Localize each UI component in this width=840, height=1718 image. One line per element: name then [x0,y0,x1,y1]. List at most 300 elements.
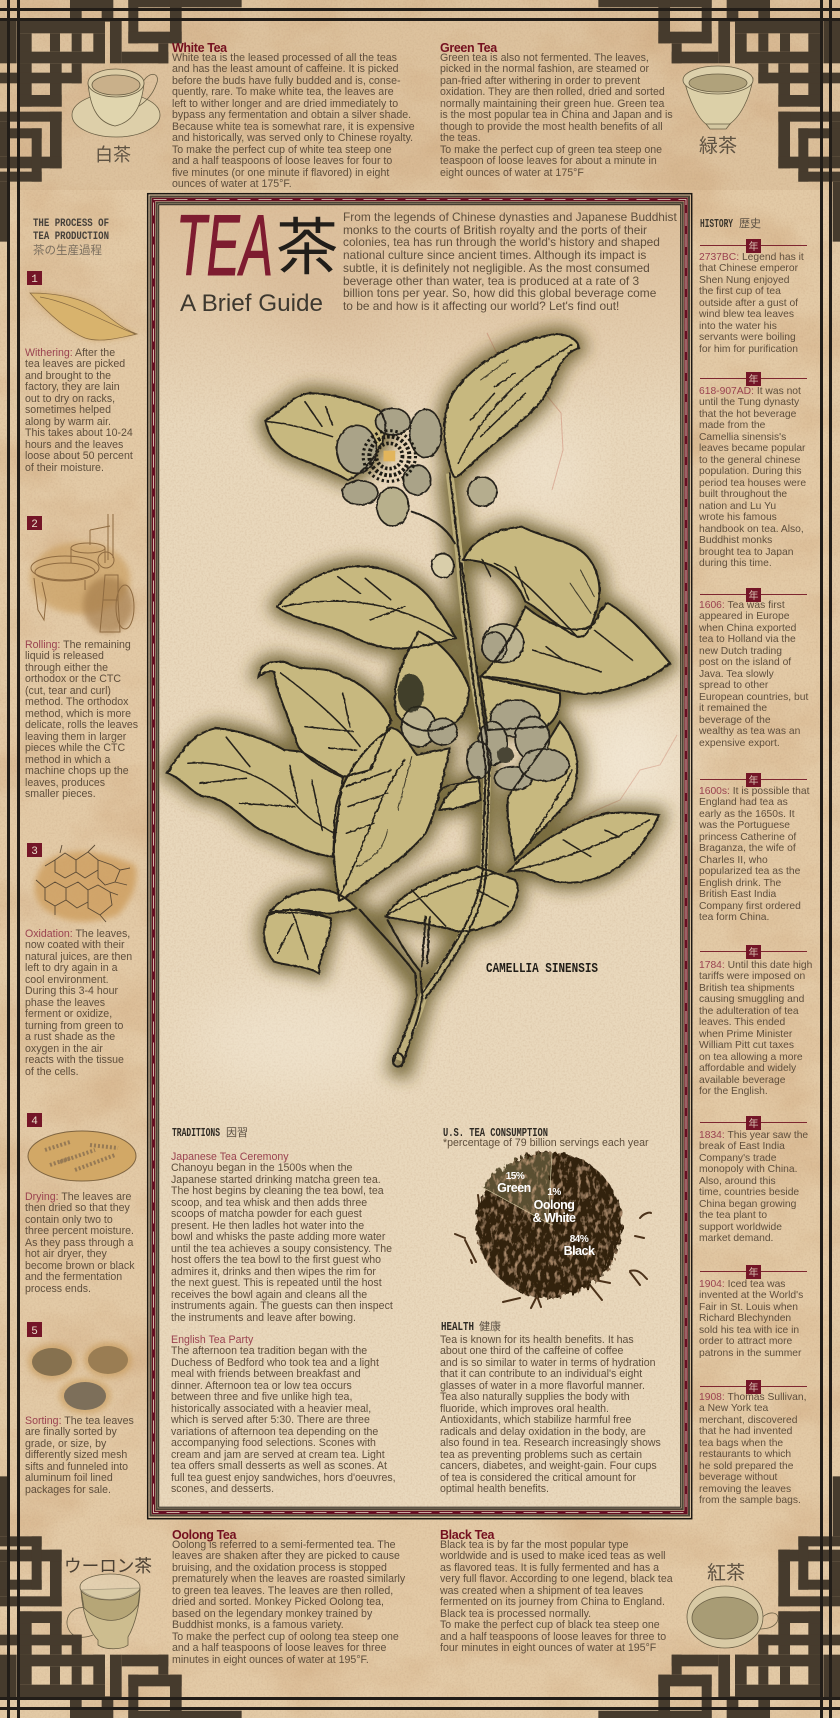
history text 2737BC: 2737BC: Legend has it [699,252,804,263]
text: white tea: To make the perfect cup of white tea steep one [172,144,392,156]
health heading: 健康 [479,1318,501,1334]
title [176,197,338,317]
step 1 badge [27,271,42,286]
white tea label: 白茶 [95,141,131,167]
corner fret bottom right [598,1476,840,1718]
text: white tea: left to wither longer and are dried immediately to [172,98,398,110]
step 4 drying tray illustration [28,1131,136,1181]
health text: Antioxidants, which stabilize harmful free [440,1414,631,1426]
health text: glasses of water in a more flavorful manner. [440,1380,645,1392]
history text 1600s: Company first ordered [699,901,801,912]
history text 618-907AD: until the Tung dynasty [699,397,799,408]
history text 1606: it remained the [699,703,767,714]
step 1 text: tea leaves are picked [25,358,125,370]
black tea cup [687,1586,778,1648]
text: black tea: worldwide and is used to make iced teas as well [440,1550,666,1562]
history text 1834: the tea plant to [699,1210,767,1221]
pie labels: Green [497,1181,531,1195]
history text 2737BC: into the water his [699,321,777,332]
history text 1834: China began growing [699,1199,796,1210]
health text: also found in tea. Research increasingly shows [440,1437,661,1449]
step 3 text: reacts with the tissue [25,1054,124,1066]
step 3 text: cool environment. [25,974,109,986]
traditions heading: 因習 [226,1124,248,1140]
traditions: japanese tea ceremony text: Chanoyu began in the 1500s when the [171,1162,352,1174]
health text: that it can contribute to an individual's eight [440,1368,642,1380]
text: black tea: and a half teaspoons of loose leaves for three to [440,1631,666,1643]
step 3 text: now coated with their [25,939,125,951]
step 4 text: then dried so that they [25,1202,130,1214]
step 2 text: method. The orthodox [25,696,128,708]
history text 1600s: early as the 1650s. It [699,809,795,820]
step 1 leaf illustration [30,293,137,340]
step 3 text: of the cells. [25,1066,79,1078]
history text 1606: European countries, but [699,692,808,703]
step 2 rolling machine illustration [30,514,134,633]
black tea label: 紅茶 [707,1558,745,1585]
history text 1600s: British East India [699,889,776,900]
text: oolong tea: minutes in eight ounces of water at 195°F. [172,1654,369,1666]
history text 1904: 1904: Iced tea was [699,1279,785,1290]
text: white tea: and historically, was served only to Chinese royalty. [172,132,413,144]
white tea cup [72,69,160,137]
history text 1834: 1834: This year saw the [699,1130,808,1141]
history text 1606: 1606: Tea was first [699,600,785,611]
corner fret top left [0,0,242,242]
history marker 1908: 年 [748,1379,758,1394]
traditions: japanese tea ceremony text: present. He then ladles hot water into the [171,1220,364,1232]
history text 1606: appeared in Europe [699,611,789,622]
step 1 text: This takes about 10-24 [25,427,133,439]
history text 1834: break of East India [699,1141,785,1152]
intro text: national culture since ancient times. Although its impact is [343,248,646,262]
history text 1834: monopoly with China. [699,1164,797,1175]
history text 1834 [699,1130,808,1244]
history text 1908: he sold prepared the [699,1461,793,1472]
step 1 text: Withering: After the [25,347,115,359]
health text: and is so similar to water in terms of hydration [440,1357,656,1369]
history text 1908: that he had invented [699,1426,792,1437]
health text [440,1334,661,1495]
text: green tea: pan-fried after withering in order to prevent [440,75,640,87]
traditions: english tea party text: variations of afternoon tea depending on the [171,1426,378,1438]
history text 1908: 1908: Thomas Sullivan, [699,1392,806,1403]
step 5 text: aluminum foil lined [25,1472,113,1484]
text: oolong tea: prematurely when the leaves are roasted similarly [172,1573,405,1585]
plant outlines and veins [167,334,670,1067]
process heading: THE PROCESS OF [33,218,109,230]
title kanji: 茶 [276,197,338,287]
history text 1606: wealthy as tea was an [699,726,800,737]
step 5 text: sifts and funneled into [25,1461,128,1473]
step 5 text: are finally sorted by [25,1426,117,1438]
history text 618-907AD: built throughout the [699,489,787,500]
intro text: monks to the courts of British royalty and the ports of their [343,223,647,237]
text: green tea: the teas. [440,132,481,144]
step 2 text: leaves, produces [25,777,105,789]
plant leaf fills [167,334,670,973]
history text 1784 [699,960,812,1097]
health text: radicals and delay oxidation in the body, are [440,1426,646,1438]
traditions: japanese tea ceremony text: admires it, drinks and then wipes the rim for [171,1266,376,1278]
process heading [33,218,109,258]
history text 1606: Java. Tea slowly [699,669,774,680]
step 5 text [25,1415,134,1496]
green tea label: 緑茶 [699,131,737,158]
process heading: 茶の生産過程 [33,242,102,258]
traditions: japanese tea ceremony text: scoops of matcha powder for each guest [171,1208,362,1220]
history text 1834: market demand. [699,1233,773,1244]
text: green tea: is the most popular tea in China and Japan and is [440,109,673,121]
consumption subtitle: *percentage of 79 billion servings each year [443,1137,649,1149]
history text 1600s: Braganza, the wife of [699,843,796,854]
health text: about one third of the caffeine of coffee [440,1345,623,1357]
text: green tea: normally maintaining their green hue. Green tea [440,98,664,110]
consumption heading: U.S. TEA CONSUMPTION [443,1127,548,1140]
history text 618-907AD: made from the [699,420,765,431]
pie labels: 84% [570,1234,589,1245]
heading: oolong tea: Oolong Tea [172,1528,236,1542]
step 1 text: of their moisture. [25,462,104,474]
step 4 text: As they pass through a [25,1237,133,1249]
step 3 text: ferment or oxidize, [25,1008,112,1020]
history marker 1600s: 年 [748,772,758,787]
step 3 text: Oxidation: The leaves, [25,928,130,940]
oolong tea label: ウーロン茶 [64,1553,152,1578]
text: green tea: though to provide the most health benefits of all [440,121,663,133]
step 5 text: packages for sale. [25,1484,111,1496]
text: black tea: To make the perfect cup of black tea steep one [440,1619,660,1631]
traditions: japanese tea ceremony text: Japanese Tea Ceremony [171,1151,289,1163]
subtitle: A Brief Guide [180,290,323,317]
step 4 badge [27,1113,42,1128]
history text 1904: patrons in the summer [699,1348,801,1359]
step 2 badge [27,516,42,531]
history text 618-907AD: wrote his famous [699,512,777,523]
step 4 text: three percent moisture. [25,1225,134,1237]
history marker 1904: 年 [748,1264,758,1279]
central panel [148,194,692,1519]
step 5 text: Sorting: The tea leaves [25,1415,134,1427]
history text 2737BC [699,252,804,355]
history heading: 歴史 [739,215,761,231]
step 5 badge: 5 [31,1326,38,1338]
text: oolong tea: leaves are shaken after they are picked to cause [172,1550,400,1562]
panel border [148,194,692,1519]
step 3 text [25,928,132,1078]
intro text: subtle, it is definitely not negligible. As the most consumed [343,261,650,275]
history marker 2737BC: 年 [748,238,758,253]
text: white tea: before the buds have fully budded and is, conse- [172,75,401,87]
text: oolong tea: dried and sorted. Monkey Picked Oolong tea, [172,1596,384,1608]
pie labels: & White [532,1211,576,1225]
text: oolong tea: Oolong is referred to a semi-fermented tea. The [172,1539,396,1551]
heading: green tea: Green Tea [440,41,497,55]
history text 618-907AD: during this time. [699,558,772,569]
step 3 badge: 3 [31,846,38,858]
green tea wedge [482,1153,552,1223]
traditions: english tea party text [171,1334,396,1495]
step 2 text: pieces while the CTC [25,742,125,754]
health text: Tea also naturally supplies the body with [440,1391,630,1403]
step 1 text: hours and the leaves [25,439,123,451]
traditions: japanese tea ceremony text [171,1151,393,1324]
intro text: beverage other than water, tea is produced at a rate of 3 [343,274,639,288]
history text 1908: from the sample bags. [699,1495,801,1506]
text: white tea: five minutes (or one minute if flavored) in eight [172,167,389,179]
process heading: TEA PRODUCTION [33,231,109,243]
history text 1908: restaurants to which [699,1449,791,1460]
step 2 text: orthodox or the CTC [25,673,121,685]
step 3 text: oxygen in the air [25,1043,103,1055]
traditions: english tea party text: between three and five unlike high tea, [171,1391,352,1403]
step 2 text: Rolling: The remaining [25,639,131,651]
history text 1834: support worldwide [699,1222,782,1233]
intro text [343,210,677,313]
history text 1908: beverage without [699,1472,777,1483]
health heading [441,1318,501,1334]
history text 1606: new Dutch trading [699,646,782,657]
flower centres [384,451,514,763]
text: oolong tea [172,1539,406,1666]
step 2 text: leaving them in larger [25,731,126,743]
step 4 text: Drying: The leaves are [25,1191,131,1203]
history text 618-907AD: to the general chinese [699,455,800,466]
step 3 text: turning from green to [25,1020,123,1032]
health text: optimal health benefits. [440,1483,549,1495]
text: oolong tea: Buddhist monks, is a famous variety. [172,1619,344,1631]
history text 1784: when Prime Minister [699,1029,792,1040]
history text 618-907AD: Camellia sinensis's [699,432,786,443]
step 1 badge: 1 [31,274,38,286]
text: green tea: To make the perfect cup of green tea steep one [440,144,662,156]
text: black tea: four minutes in eight ounces of water at 195°F [440,1642,656,1654]
heading: black tea: Black Tea [440,1528,494,1542]
health text: cancers, diabetes, and weight-gain. Four cups [440,1460,657,1472]
traditions: japanese tea ceremony text: scoop, and tea whisk and then adds three [171,1197,367,1209]
step 1 text: out to dry on racks, [25,393,115,405]
text: oolong tea: bruising, and the oxidation process is stopped [172,1562,387,1574]
history text 1834: time, countries beside [699,1187,799,1198]
tea consumption pie made of loose tea [455,1152,651,1308]
text: black tea: as flavored teas. It is fully fermented and has a [440,1562,659,1574]
traditions: japanese tea ceremony text: until the tea achieves a soupy consistency. The [171,1243,392,1255]
history text 2737BC: Shen Nung enjoyed [699,275,789,286]
history text 1784: causing smuggling and [699,994,804,1005]
history text 2737BC: that Chinese emperor [699,263,798,274]
plant stamens [363,431,424,713]
history text 1606: tea to Holland via the [699,634,796,645]
history text 1784: available beverage [699,1075,785,1086]
text: black tea: Black tea is by far the most popular type [440,1539,628,1551]
step 4 text: and the fermentation [25,1271,122,1283]
history text 2737BC: servants were boiling [699,332,796,343]
history text 1606: expensive export. [699,738,780,749]
step 2 text: method in which a [25,754,110,766]
intro text: colonies, tea has run through the world's history and shaped [343,235,660,249]
traditions: english tea party text: accompanying food selections. Scones with [171,1437,376,1449]
text: green tea: eight ounces of water at 175°F [440,167,584,179]
step 3 text: During this 3-4 hour [25,985,118,997]
traditions: english tea party text: meal with friends between breakfast and [171,1368,361,1380]
history text 1600s [699,786,810,923]
history text 1606: when China exported [699,623,796,634]
history marker 1834: 年 [748,1115,758,1130]
text: oolong tea: based on the legendary monkey trained by [172,1608,372,1620]
pie divider lines [482,1153,553,1225]
traditions: english tea party text: The afternoon tea tradition began with the [171,1345,367,1357]
history text 1600s: 1600s: It is possible that [699,786,809,797]
traditions: english tea party text: full tea guest enjoy sandwiches, hors d'oeuvres, [171,1472,396,1484]
step 3 text: natural juices, are then [25,951,132,963]
history text 618-907AD: nation and Lu Yu [699,501,776,512]
text: green tea [440,52,673,179]
history text 1834: Company's trade [699,1153,777,1164]
history text 1784: British tea shipments [699,983,795,994]
text: green tea: teaspoon of loose leaves for about a minute in [440,155,657,167]
health text: Tea is known for its health benefits. It has [440,1334,634,1346]
title word TEA: TEA [176,198,273,294]
text: black tea: was created when a shipment of tea leaves [440,1585,643,1597]
traditions: english tea party text: which is served after 5:30. There are three [171,1414,370,1426]
history text 1784: affordable and widely [699,1063,796,1074]
history text 1784: on tea allowing a more [699,1052,803,1063]
text: black tea [440,1539,673,1654]
health text: tea as preventing problems such as certain [440,1449,642,1461]
history text 1908: tea bags when the [699,1438,783,1449]
traditions: japanese tea ceremony text: the instruments and leave after bowing. [171,1312,356,1324]
step 2 text: delicate, rolls the leaves [25,719,138,731]
step 2 badge: 2 [31,519,38,531]
step 5 badge [27,1322,42,1338]
stray tea leaves [455,1195,651,1308]
intro text: From the legends of Chinese dynasties and Japanese Buddhist [343,210,677,224]
oolong tea cup [67,1574,140,1649]
text: white tea [172,52,415,190]
history text 2737BC: for him for purification [699,344,798,355]
history text 1606: spread to other [699,680,768,691]
plant stem fill [398,473,488,1060]
plant petals [337,408,569,790]
history marker 618-907AD: 年 [748,371,758,386]
text: green tea: picked in the normal fashion, are steamed or [440,63,649,75]
step 2 text: liquid is released [25,650,104,662]
traditions: english tea party text: dinner. Afternoon tea or low tea occurs [171,1380,352,1392]
history text 618-907AD: Buddhist monks [699,535,772,546]
text: white tea: and a half teaspoons of loose leaves for four to [172,155,392,167]
health heading: HEALTH [441,1321,474,1334]
history text 1784: William Pitt cut taxes [699,1040,794,1051]
traditions: japanese tea ceremony text: receives the bowl again and cleans all the [171,1289,367,1301]
history text 1904: sold his tea with ice in [699,1325,799,1336]
history text 1606: post on the island of [699,657,791,668]
history text 1908: removing the leaves [699,1484,791,1495]
step 3 text: phase the leaves [25,997,105,1009]
text: white tea: White tea is the leased processed of all the teas [172,52,397,64]
history text 1600s: popularized tea as the [699,866,800,877]
step 4 text: become brown or black [25,1260,135,1272]
history text 618-907AD: that the hot beverage [699,409,796,420]
text: white tea: Because white tea is somewhat rare, it is expensive [172,121,415,133]
step 2 text: (cut, tear and curl) [25,685,111,697]
text: oolong tea: and a half teaspoons of loose leaves for three [172,1642,386,1654]
history text 1904: order to attract more [699,1336,792,1347]
corner fret top right [598,0,840,242]
history text 1600s: was the Portuguese [699,820,790,831]
traditions: english tea party text: tea offers small desserts as well as scones. At [171,1460,387,1472]
traditions: japanese tea ceremony text: host offers the tea bowl to the first guest who [171,1254,381,1266]
step 4 badge: 4 [31,1116,38,1128]
traditions: english tea party text: scones, and desserts. [171,1483,274,1495]
step 2 text [25,639,138,800]
text: black tea: fermented on its journey from China to England. [440,1596,665,1608]
traditions: japanese tea ceremony text: The host begins by cleaning the tea bowl, tea [171,1185,384,1197]
history text 1904: Fair in St. Louis when [699,1302,798,1313]
step 4 text: contain only two to [25,1214,113,1226]
history text 1784: leaves. This ended [699,1017,785,1028]
history text 1834: Also, around this [699,1176,776,1187]
step 1 text: factory, they are lain [25,381,120,393]
history text 1908 [699,1392,806,1506]
traditions: japanese tea ceremony text: instruments again. The guests can then inspect [171,1300,393,1312]
heading: white tea: White Tea [172,41,227,55]
history text 1904: invented at the World's [699,1290,803,1301]
history text 1784: tariffs were imposed on [699,971,805,982]
history text 1904: Richard Blechynden [699,1313,791,1324]
pie labels: 15% [506,1171,525,1182]
text: black tea: Black tea is processed normally. [440,1608,591,1620]
intro text: billion tons per year. So, how did this global beverage come [343,286,656,300]
pie labels [497,1171,595,1258]
traditions: japanese tea ceremony text: the next guest. This is repeated until the host [171,1277,382,1289]
pie labels: Oolong [534,1198,574,1212]
green tea cup [683,66,753,129]
text: green tea: oxidation. They are then rolled, dried and sorted [440,86,665,98]
text: green tea: Green tea is also not fermented. The leaves, [440,52,649,64]
history text 618-907AD: brought tea to Japan [699,547,793,558]
traditions heading: TRADITIONS [172,1127,220,1140]
history text 618-907AD: handbook on tea. Also, [699,524,804,535]
history text 2737BC: outside after a gust of [699,298,798,309]
traditions: japanese tea ceremony text: Japanese started drinking matcha green tea. [171,1174,381,1186]
history text 2737BC: wind blew tea leaves [699,309,794,320]
intro text: to be and how is it affecting our world? Let's find out! [343,299,619,313]
corner fret bottom left [0,1476,242,1718]
step 1 text: and brought to the [25,370,111,382]
history text 1904 [699,1279,803,1359]
text: white tea: ounces of water at 175°F. [172,178,292,190]
text: oolong tea: To make the perfect cup of oolong tea steep one [172,1631,399,1643]
step 4 text: hot air dryer, they [25,1248,107,1260]
step 5 text: differently sized mesh [25,1449,127,1461]
traditions: english tea party text: English Tea Party [171,1334,253,1346]
history text 1600s: princess Catherine of [699,832,796,843]
step 4 text [25,1191,135,1295]
pie labels: 1% [547,1187,561,1198]
history marker 1784: 年 [748,944,758,959]
pie labels: Black [564,1244,595,1258]
traditions: english tea party text: cream and jam are served at cream tea. Light [171,1449,385,1461]
step 3 text: a rust shade as the [25,1031,115,1043]
step 2 text: method, which is more [25,708,131,720]
history text 618-907AD: period tea houses were [699,478,806,489]
step 1 text: along by warm air. [25,416,111,428]
health text: of tea is considered the critical amount for [440,1472,636,1484]
health text: fluoride, which improves oral health. [440,1403,609,1415]
history marker 1606: 年 [748,587,758,602]
history text 2737BC: the first cup of tea [699,286,781,297]
step 1 text: sometimes helped [25,404,111,416]
